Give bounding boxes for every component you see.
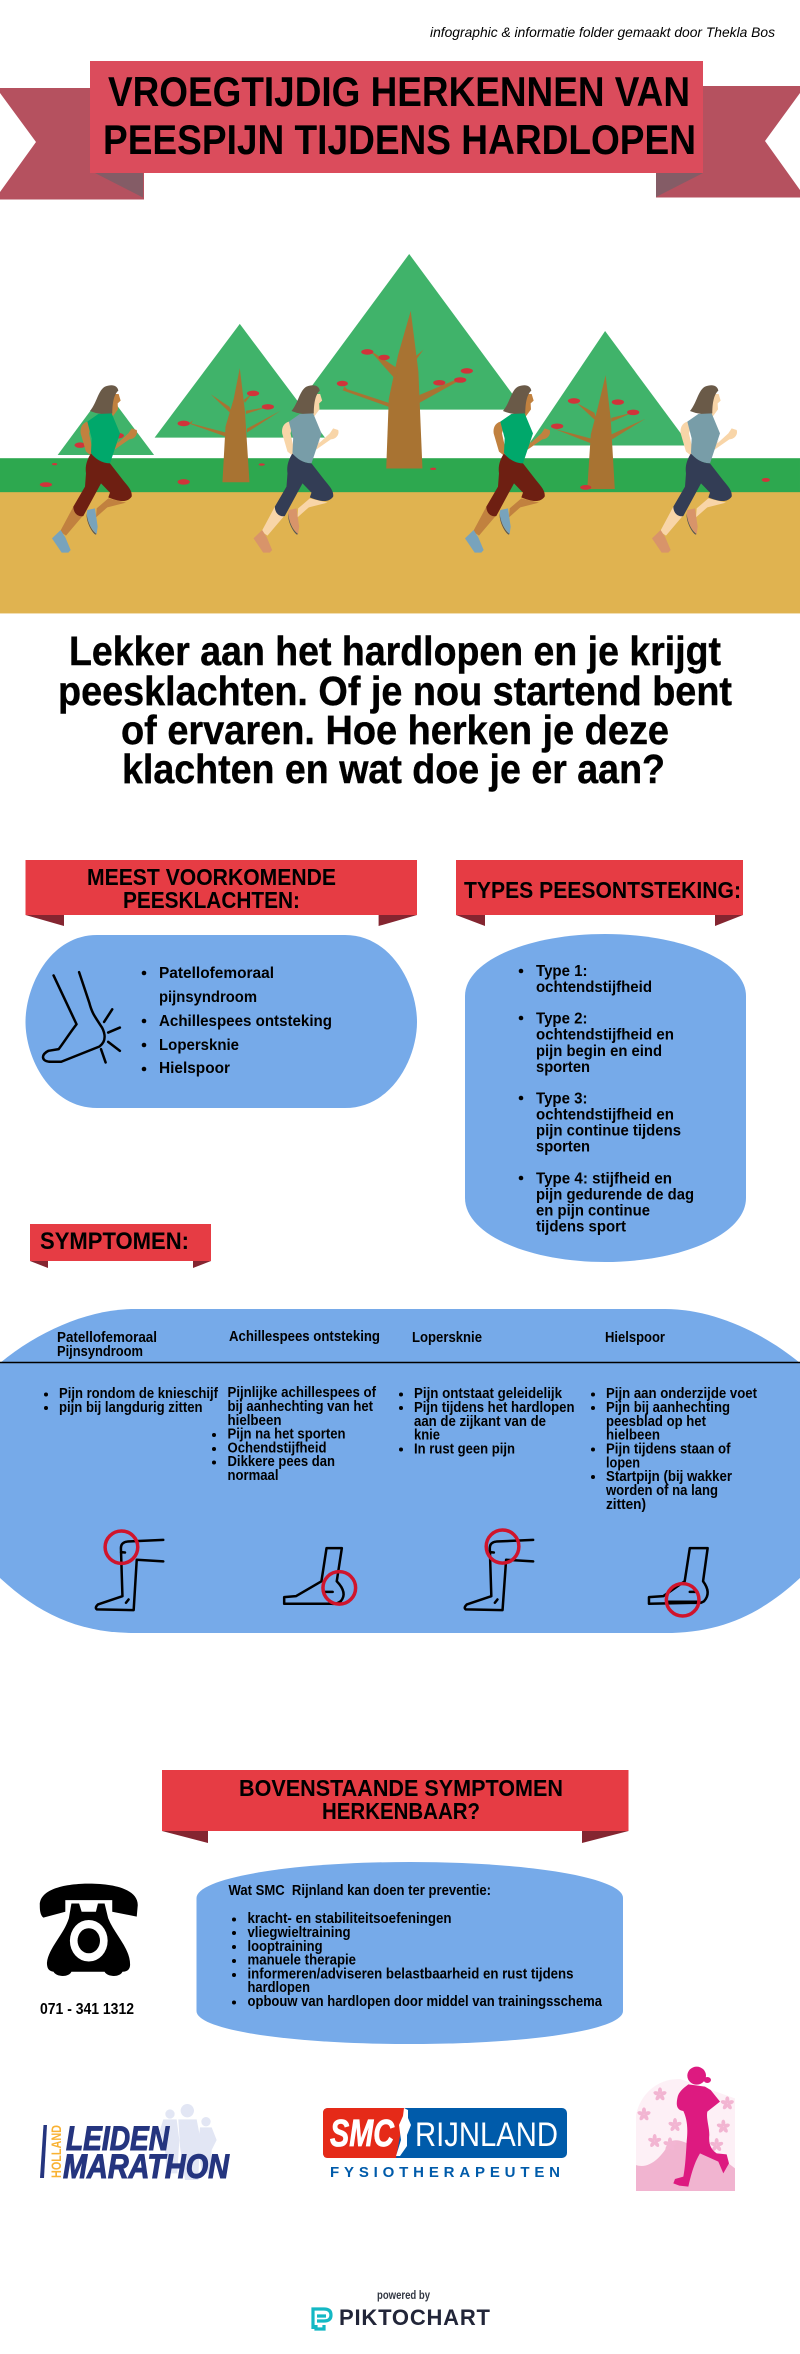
- types list: ochtendstijfheid en: [536, 1106, 674, 1124]
- ribbon: types peesontsteking: [456, 860, 743, 926]
- logo: holland leiden marathon: [40, 2104, 230, 2186]
- column 2 symptoms: Pijn na het sporten: [228, 1426, 346, 1442]
- prevention intro: Wat SMC Rijnland kan doen ter preventie:: [228, 1883, 491, 1899]
- panel: symptoms table: [0, 1309, 800, 1633]
- types list: en pijn continue: [536, 1202, 650, 1220]
- prevention list: informeren/adviseren belastbaarheid en rust tijdens: [248, 1966, 574, 1982]
- column headers: Patellofemoraal: [57, 1330, 157, 1346]
- column headers: Lopersknie: [412, 1330, 482, 1346]
- column 3 symptoms: [399, 1386, 574, 1458]
- ribbon: bovenstaande symptomen herkenbaar: BOVENSTAANDE SYMPTOMEN: [239, 1775, 563, 1801]
- banner main panel: [90, 61, 703, 173]
- complaints list: Achillespees ontsteking: [159, 1013, 332, 1030]
- logo: smc rijnland fysiotherapeuten: [323, 2108, 567, 2181]
- ribbon: meest voorkomende peesklachten: [26, 860, 417, 926]
- logo: smc rijnland fysiotherapeuten: SMC: [330, 2113, 394, 2155]
- logo: holland leiden marathon: MARATHON: [63, 2148, 230, 2186]
- intro heading: [58, 628, 732, 792]
- prevention list: manuele therapie: [248, 1952, 356, 1968]
- column 4 symptoms: [591, 1386, 757, 1513]
- types list: pijn continue tijdens: [536, 1122, 681, 1140]
- column 2 symptoms: normaal: [228, 1468, 278, 1484]
- banner left tail: [0, 88, 144, 200]
- main title: VROEGTIJDIG HERKENNEN VAN: [108, 68, 690, 115]
- complaints list: Patellofemoraal: [159, 965, 274, 982]
- main title: [103, 68, 696, 163]
- main title: PEESPIJN TIJDENS HARDLOPEN: [103, 116, 696, 163]
- column 4 symptoms: Pijn aan onderzijde voet: [606, 1386, 757, 1402]
- powered by label: powered by: [377, 2288, 430, 2302]
- icon: knee leg 1: [96, 1531, 163, 1610]
- intro heading: Lekker aan het hardlopen en je krijgt: [69, 628, 721, 674]
- logo: smc rijnland fysiotherapeuten: FYSIOTHERAPEUTEN: [330, 2164, 560, 2181]
- types list: pijn gedurende de dag: [536, 1186, 694, 1204]
- intro heading: klachten en wat doe je er aan?: [122, 746, 665, 792]
- logo: pink runner with flowers: [636, 2067, 735, 2191]
- types list: sporten: [536, 1138, 590, 1156]
- complaints list: Lopersknie: [159, 1037, 239, 1054]
- column 2 symptoms: Pijnlijke achillespees of: [228, 1385, 376, 1401]
- column 2 symptoms: Ochendstijfheid: [228, 1440, 326, 1456]
- logo: holland leiden marathon: LEIDEN: [66, 2120, 170, 2158]
- column 3 symptoms: Pijn tijdens het hardlopen: [414, 1400, 574, 1416]
- phone number: 071 - 341 1312: [40, 2001, 134, 2018]
- scene: runners in park: [0, 254, 800, 613]
- types list: Type 4: stijfheid en: [536, 1170, 672, 1188]
- ribbon: bovenstaande symptomen herkenbaar: HERKENBAAR?: [322, 1798, 480, 1824]
- complaints list: [142, 965, 332, 1077]
- runner 2: [253, 385, 339, 553]
- logo: smc rijnland fysiotherapeuten: RIJNLAND: [415, 2116, 558, 2154]
- types list: ochtendstijfheid en: [536, 1026, 674, 1044]
- icon: achilles foot: [284, 1548, 356, 1604]
- ribbon: types peesontsteking: TYPES PEESONTSTEKING:: [464, 877, 741, 903]
- types list: Type 3:: [536, 1090, 588, 1108]
- prevention list: [232, 1911, 603, 2010]
- column 4 symptoms: zitten): [606, 1497, 646, 1513]
- panel: types of tendinitis: [465, 934, 746, 1262]
- ribbon: meest voorkomende peesklachten: PEESKLACHTEN:: [123, 887, 300, 913]
- column 3 symptoms: In rust geen pijn: [414, 1442, 515, 1458]
- runner 1: [52, 385, 137, 553]
- logo: piktochart: PIKTOCHART: [339, 2305, 491, 2330]
- column 4 symptoms: lopen: [606, 1456, 640, 1472]
- ribbon: bovenstaande symptomen herkenbaar: [162, 1770, 628, 1843]
- column 1 symptoms: Pijn rondom de knieschijf: [59, 1386, 218, 1402]
- types list: pijn begin en eind: [536, 1043, 662, 1060]
- column 3 symptoms: knie: [414, 1428, 440, 1444]
- column 3 symptoms: Pijn ontstaat geleidelijk: [414, 1386, 563, 1402]
- panel: prevention: [196, 1862, 623, 2044]
- prevention list: opbouw van hardlopen door middel van trainingsschema: [248, 1994, 603, 2010]
- icon: telephone: [40, 1884, 138, 1976]
- title banner: [0, 61, 800, 200]
- prevention list: vliegwieltraining: [248, 1925, 350, 1941]
- types list: sporten: [536, 1059, 590, 1076]
- park background: [0, 254, 800, 613]
- column 2 symptoms: hielbeen: [228, 1413, 282, 1429]
- column 4 symptoms: Pijn bij aanhechting: [606, 1400, 730, 1416]
- column headers: [57, 1329, 665, 1360]
- complaints list: pijnsyndroom: [159, 989, 257, 1006]
- prevention list: looptraining: [248, 1939, 322, 1955]
- ribbon: symptomen: [30, 1224, 211, 1268]
- intro heading: of ervaren. Hoe herken je deze: [121, 707, 669, 753]
- prevention list: hardlopen: [248, 1980, 310, 1996]
- banner right fold: [656, 173, 703, 197]
- icon: heel spur foot: [649, 1548, 708, 1616]
- banner left fold: [95, 173, 143, 198]
- runner 3: [465, 385, 550, 553]
- runner 4: [652, 385, 737, 553]
- prevention list: kracht- en stabiliteitsoefeningen: [248, 1911, 452, 1927]
- types list: tijdens sport: [536, 1218, 627, 1236]
- column 4 symptoms: peesblad op het: [606, 1414, 706, 1430]
- column 1 symptoms: pijn bij langdurig zitten: [59, 1400, 202, 1416]
- icon: runner's knee: [465, 1530, 533, 1610]
- column 4 symptoms: Pijn tijdens staan of: [606, 1442, 731, 1458]
- panel: common complaints: [26, 935, 417, 1108]
- column 2 symptoms: Dikkere pees dan: [228, 1454, 335, 1470]
- types list: [519, 963, 694, 1236]
- column 4 symptoms: worden of na lang: [605, 1483, 718, 1499]
- banner right tail: [656, 86, 800, 198]
- types list: Type 1:: [536, 963, 588, 980]
- column 2 symptoms: bij aanhechting van het: [228, 1399, 373, 1415]
- column 4 symptoms: hielbeen: [606, 1428, 660, 1444]
- types list: ochtendstijfheid: [536, 979, 652, 996]
- intro heading: peesklachten. Of je nou startend bent: [58, 668, 732, 714]
- column headers: Achillespees ontsteking: [229, 1329, 380, 1345]
- credit line: infographic & informatie folder gemaakt door Thekla Bos: [430, 24, 775, 40]
- complaints list: Hielspoor: [159, 1060, 230, 1077]
- column headers: Pijnsyndroom: [57, 1344, 143, 1360]
- column 2 symptoms: [212, 1385, 376, 1484]
- column 4 symptoms: Startpijn (bij wakker: [606, 1469, 732, 1485]
- ribbon: meest voorkomende peesklachten: MEEST VOORKOMENDE: [87, 864, 336, 890]
- column 1 symptoms: [44, 1386, 218, 1416]
- column 3 symptoms: aan de zijkant van de: [414, 1414, 546, 1430]
- icon: painful foot: [43, 972, 120, 1062]
- column headers: Hielspoor: [605, 1330, 665, 1346]
- ribbon: symptomen: SYMPTOMEN:: [40, 1228, 189, 1255]
- logo: holland leiden marathon: HOLLAND: [48, 2125, 64, 2178]
- types list: Type 2:: [536, 1010, 588, 1028]
